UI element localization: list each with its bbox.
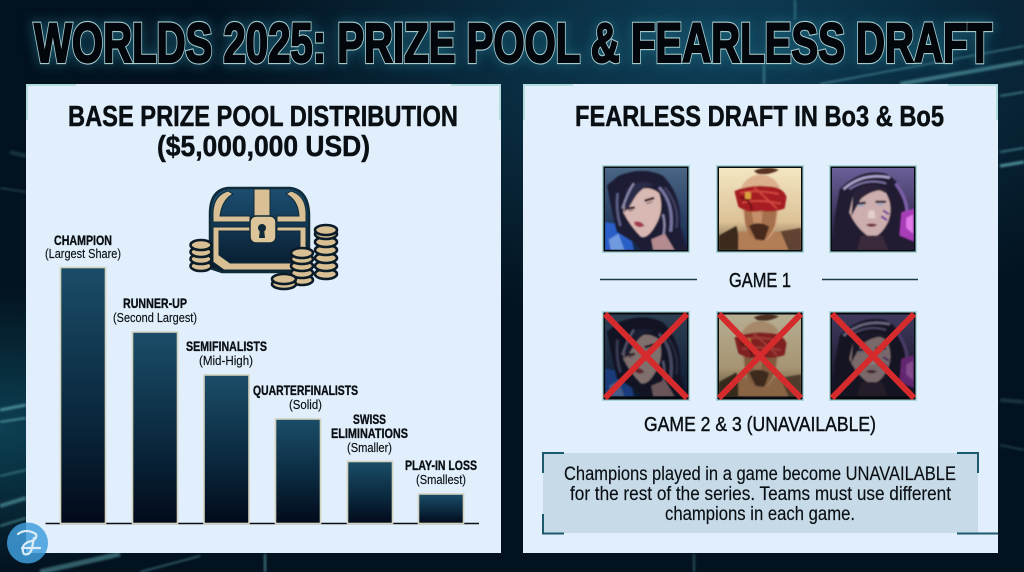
- bar: runner-up: [113, 295, 197, 524]
- bar: quarterfinalists: QUARTERFINALISTS: [253, 382, 358, 398]
- bar: champion: [45, 232, 121, 524]
- callout: fearless rule: Champions played in a game become UNAVAILABLE: [564, 464, 956, 485]
- bar chart: [45, 232, 479, 524]
- bar: swiss eliminations: SWISS: [353, 411, 386, 427]
- portrait: Ahri banned: [602, 311, 690, 401]
- bar: play-in loss: [405, 457, 477, 524]
- icon: treasure chest with coins: [190, 188, 337, 289]
- label: game 2 and 3: GAME 2 & 3 (UNAVAILABLE): [644, 413, 876, 436]
- bar: play-in loss: PLAY-IN LOSS: [405, 457, 477, 473]
- bar: runner-up: (Second Largest): [113, 310, 197, 325]
- bar: quarterfinalists: [253, 382, 358, 524]
- portrait: Lee Sin: [716, 165, 804, 253]
- game 1 champion portraits: [602, 165, 917, 253]
- bar: quarterfinalists: (Solid): [289, 397, 322, 412]
- bar: runner-up: RUNNER-UP: [123, 295, 187, 311]
- game 2 and 3 unavailable portraits: [602, 311, 917, 401]
- bar: champion: (Largest Share): [45, 246, 121, 261]
- heading: prize pool: ($5,000,000 USD): [157, 131, 370, 163]
- bar: semifinalists: (Mid-High): [199, 353, 253, 368]
- bar: swiss eliminations: (Smaller): [347, 440, 392, 455]
- callout: fearless rule: for the rest of the series. Teams must use different: [570, 484, 952, 505]
- portrait: Kai'Sa banned: [829, 311, 917, 401]
- heading: prize pool: BASE PRIZE POOL DISTRIBUTION: [68, 101, 458, 133]
- callout: fearless rule: champions in each game.: [665, 504, 855, 525]
- portrait: Kai'Sa: [829, 165, 917, 253]
- callout: fearless rule: [543, 453, 998, 534]
- heading: fearless draft: FEARLESS DRAFT IN Bo3 & Bo5: [575, 101, 944, 133]
- panel: fearless draft: [523, 84, 998, 553]
- bar: play-in loss: (Smallest): [416, 472, 466, 487]
- panel: base prize pool distribution: [26, 84, 501, 553]
- bar: swiss eliminations: [331, 411, 408, 524]
- bar: swiss eliminations: ELIMINATIONS: [331, 425, 408, 441]
- bar: champion: CHAMPION: [54, 232, 112, 248]
- label: game 1: GAME 1: [729, 270, 791, 292]
- heading: prize pool: [68, 101, 458, 163]
- portrait: Lee Sin banned: [716, 311, 804, 401]
- portrait: Ahri: [602, 165, 690, 253]
- bar: semifinalists: SEMIFINALISTS: [186, 338, 267, 354]
- bar: semifinalists: [186, 338, 267, 524]
- icon: watermark badge: [7, 522, 48, 564]
